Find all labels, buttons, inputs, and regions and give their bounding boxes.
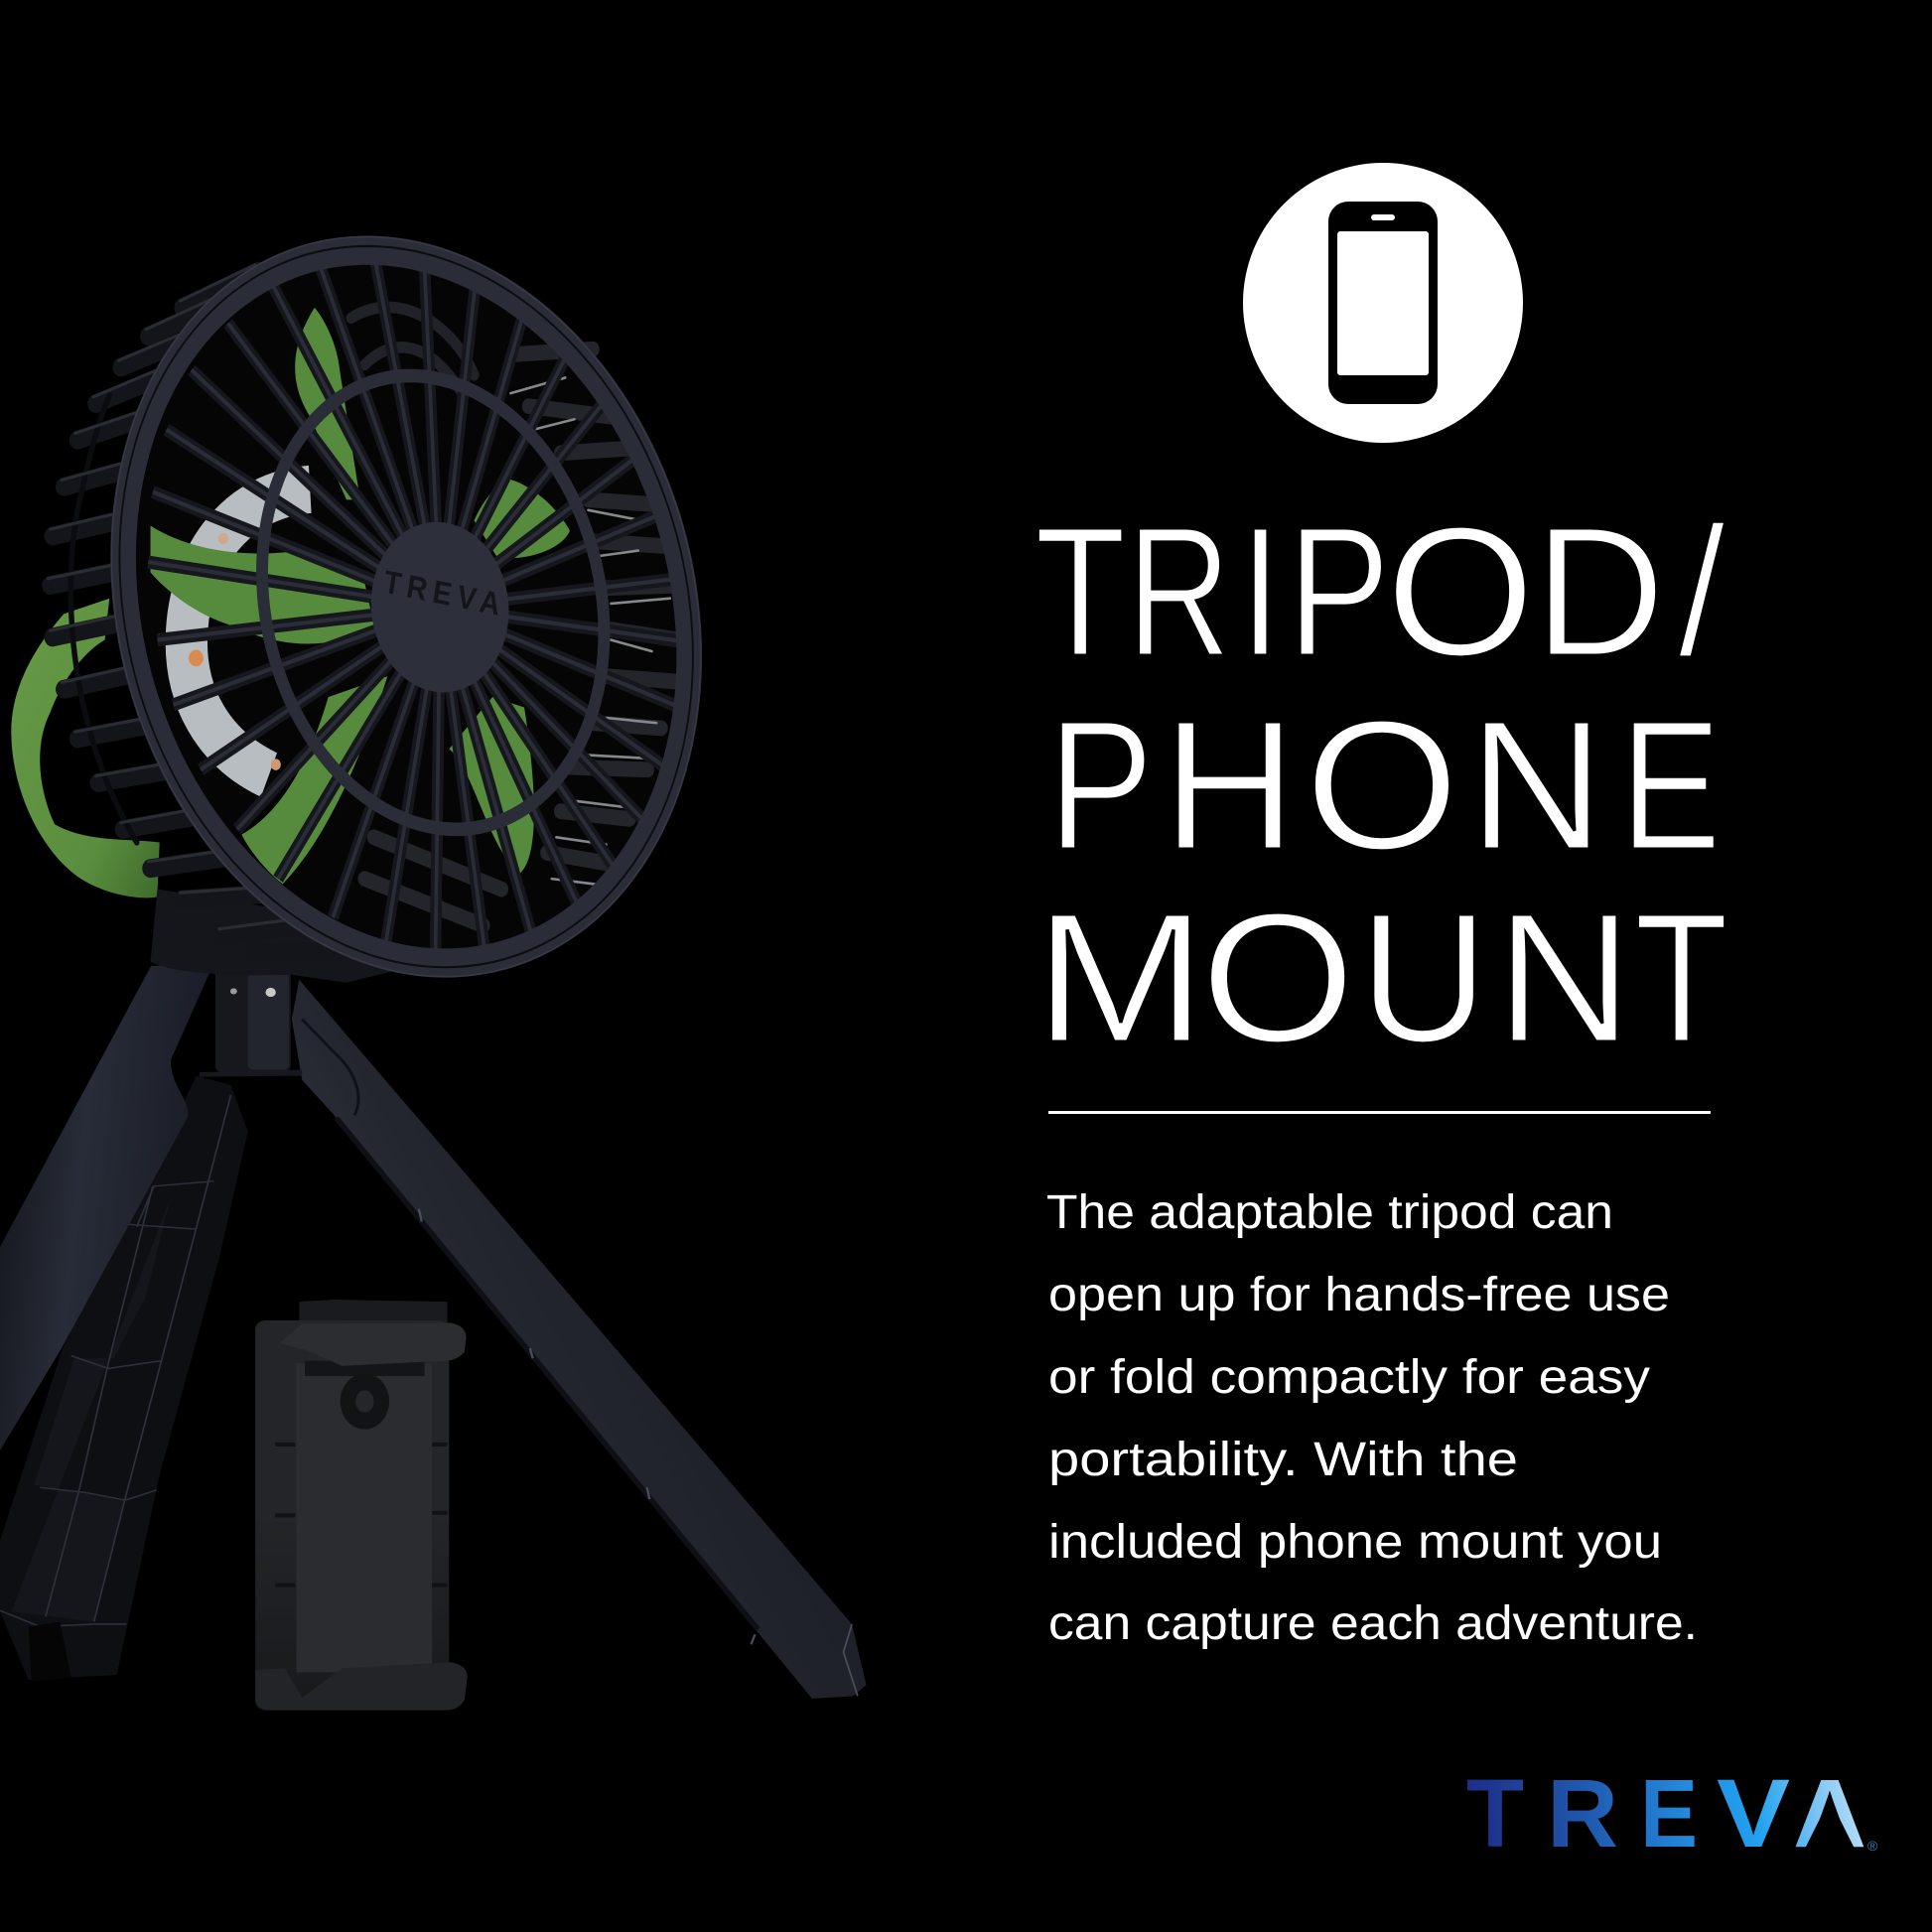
title: O (1200, 876, 1355, 1081)
TREVA brand logo: V (1717, 1759, 1790, 1867)
body text: included phone mount you (1048, 1516, 1662, 1569)
title (1034, 489, 1728, 1081)
body text: The adaptable tripod can (1046, 1186, 1613, 1239)
title: O (1386, 489, 1535, 695)
grille outer rim (2, 121, 810, 1093)
TREVA brand logo: ® (1867, 1838, 1878, 1854)
fan hub with TREVA logo: TREVA (381, 564, 502, 622)
green fan blades (151, 308, 570, 884)
title: I (1240, 489, 1281, 695)
housing ribs (51, 271, 342, 951)
phone mount (255, 1300, 468, 1711)
panel: product photo of fan on tripod with phone mount (0, 121, 866, 1711)
title: P (1047, 683, 1154, 889)
mount body (255, 1320, 449, 1711)
fan (2, 121, 810, 1093)
title: R (1127, 489, 1231, 695)
title: O (1305, 683, 1459, 889)
title: E (1620, 683, 1722, 889)
divider rule (1048, 1111, 1711, 1114)
leg hinge bracket (200, 969, 302, 1077)
title: / (1678, 489, 1725, 695)
title: N (1495, 876, 1632, 1081)
body text: open up for hands-free use (1048, 1269, 1670, 1321)
neck (151, 890, 410, 983)
body text: portability. With the (1048, 1434, 1518, 1486)
mount bottom bar (255, 1662, 468, 1711)
fan hub with TREVA logo (354, 504, 525, 710)
mount top bar (279, 1322, 467, 1366)
title: D (1534, 489, 1665, 695)
right leg (292, 980, 866, 1699)
TREVA brand logo: A (1793, 1759, 1866, 1867)
icon: phone in white circle (1243, 163, 1523, 443)
fan carry handle (11, 599, 160, 897)
body text (1046, 1186, 1698, 1650)
title: P (1288, 489, 1390, 695)
TREVA brand logo: E (1640, 1759, 1698, 1867)
body text: can capture each adventure. (1048, 1597, 1698, 1650)
tripod legs (0, 963, 866, 1699)
TREVA brand logo: R (1547, 1759, 1618, 1867)
title: M (1034, 876, 1207, 1081)
TREVA brand logo (1466, 1759, 1878, 1867)
grille inner ring (207, 320, 660, 886)
fan interior (15, 136, 797, 1077)
rear housing slats (351, 307, 679, 925)
LED light ring (187, 489, 310, 775)
mount top clip (299, 1300, 448, 1328)
title: T (1634, 876, 1728, 1081)
rear folded leg (0, 1076, 248, 1682)
title: H (1162, 683, 1297, 889)
title: N (1468, 683, 1604, 889)
left front leg (0, 963, 213, 1450)
mount inner plate (296, 1363, 432, 1672)
body text: or fold compactly for easy (1048, 1351, 1650, 1404)
title: T (1035, 489, 1126, 695)
mount mounting hole (341, 1374, 389, 1430)
TREVA brand logo: T (1466, 1759, 1524, 1867)
title: U (1359, 876, 1488, 1081)
fan grille spokes (148, 253, 691, 962)
